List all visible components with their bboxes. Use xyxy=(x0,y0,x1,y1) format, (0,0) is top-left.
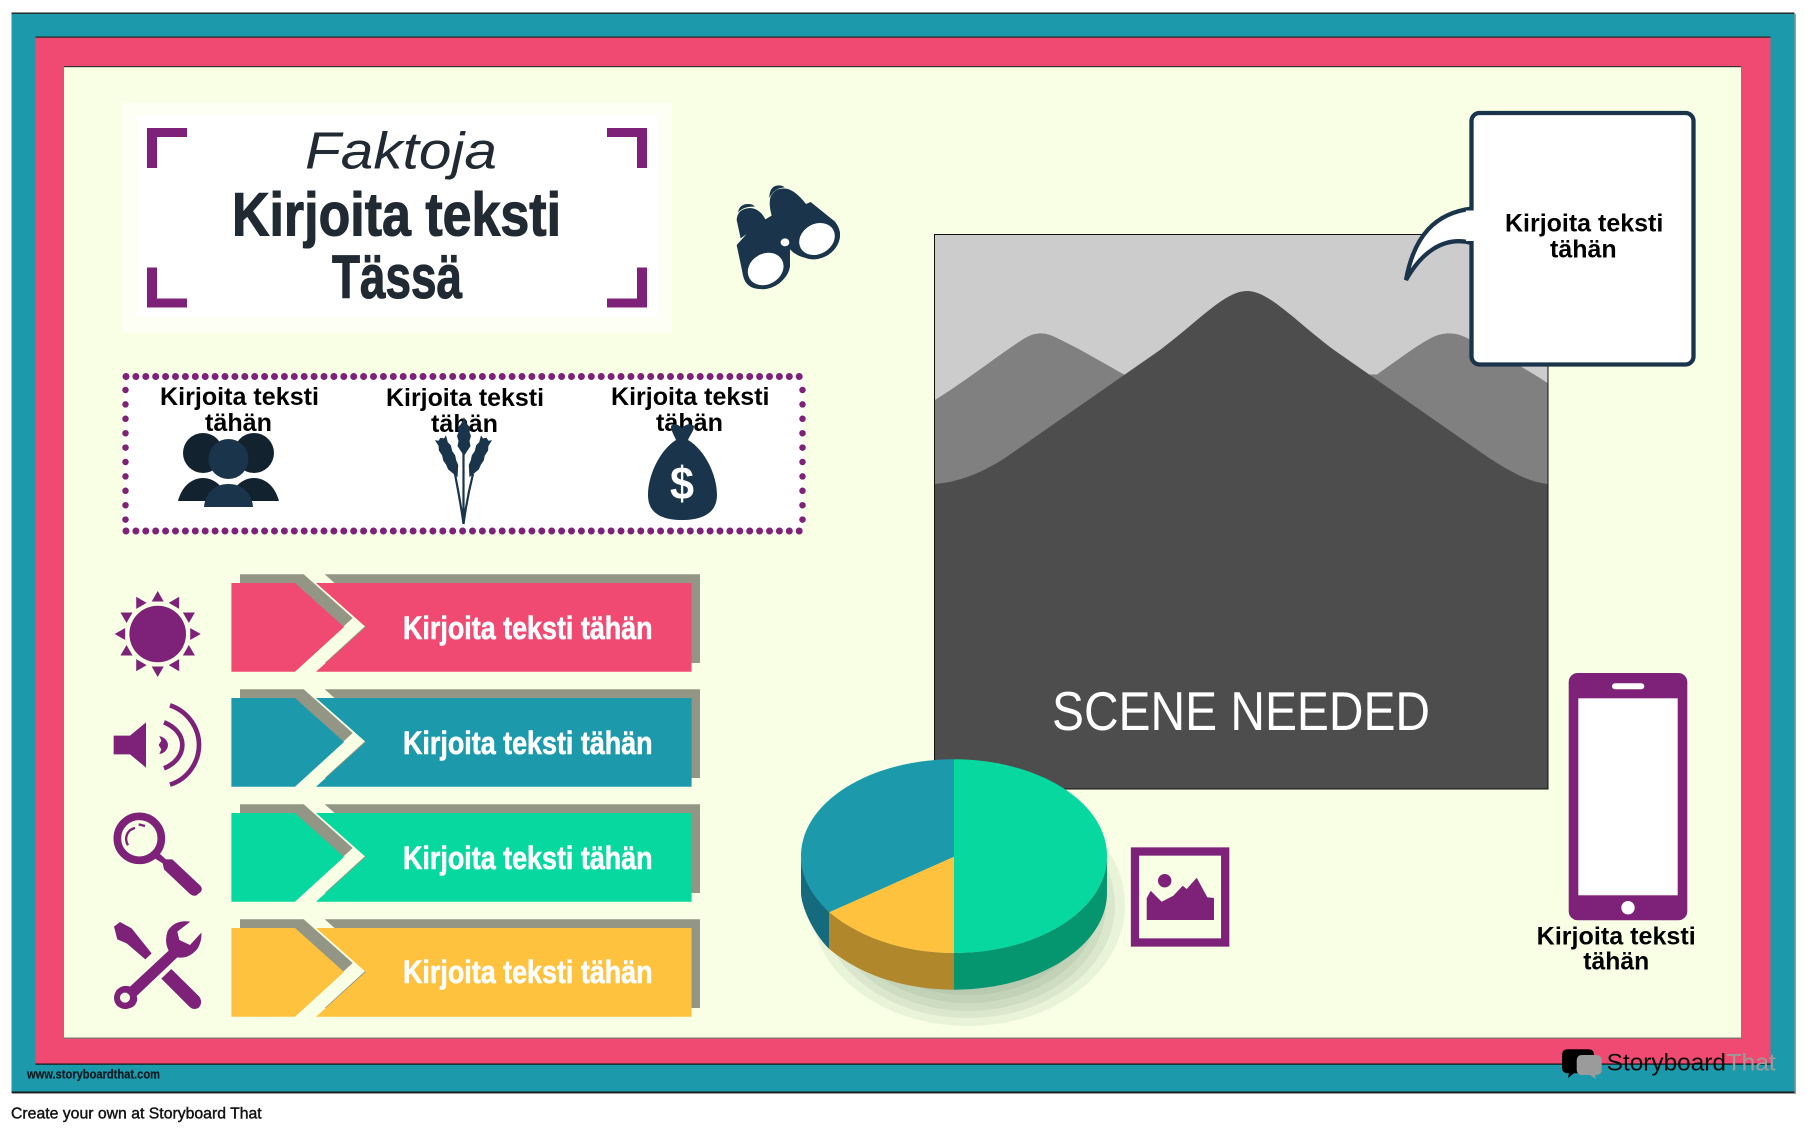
bubble text: tähän xyxy=(1550,236,1617,264)
icon: wheat xyxy=(434,417,493,524)
label: column 3 xyxy=(611,383,770,437)
slice: yellow xyxy=(829,857,954,953)
banner 3: green: Kirjoita teksti tähän xyxy=(403,840,653,876)
icon: sun xyxy=(115,591,201,677)
website url: www.storyboardthat.com xyxy=(26,1068,160,1082)
panel: scene placeholder xyxy=(934,234,1548,789)
title line: Tässä: Tässä xyxy=(332,243,463,311)
pie side walls xyxy=(801,856,829,949)
label: column 1: tähän xyxy=(205,409,272,437)
icon: speaker xyxy=(114,705,199,785)
title line: Kirjoita teksti: Kirjoita teksti xyxy=(232,180,561,248)
bubble text: Kirjoita teksti xyxy=(1505,210,1663,238)
icon: binoculars xyxy=(735,185,848,298)
label: column 3: Kirjoita teksti xyxy=(611,383,770,411)
phone caption: tähän xyxy=(1583,947,1649,975)
label: column 2: Kirjoita teksti xyxy=(386,384,544,412)
speech bubble xyxy=(1406,113,1694,364)
label: column 1: Kirjoita teksti xyxy=(160,383,319,411)
icon: smartphone xyxy=(1569,673,1687,920)
panel: dotted icon box xyxy=(124,376,803,531)
icon: people xyxy=(178,433,279,507)
footer credit: Create your own at Storyboard That xyxy=(11,1106,262,1122)
banner 4: yellow: Kirjoita teksti tähän xyxy=(403,954,653,990)
phone caption xyxy=(1537,922,1696,975)
icon: money bag: $ xyxy=(670,457,694,509)
banner 1: pink xyxy=(231,574,700,672)
scene: front mountain xyxy=(935,291,1548,788)
banner 3: green xyxy=(231,804,700,902)
scene: back mountains xyxy=(935,333,1548,484)
title block xyxy=(122,103,672,333)
icon: picture frame xyxy=(1135,852,1225,942)
label: column 2: tähän xyxy=(431,410,498,438)
slice: teal xyxy=(801,759,954,912)
logo: Storyboard That xyxy=(1562,1049,1776,1079)
banner 4: yellow xyxy=(231,919,700,1017)
pie chart xyxy=(801,759,1125,1026)
label: column 3: tähän xyxy=(656,409,723,437)
scene label: SCENE NEEDED xyxy=(1052,680,1430,742)
panel: cream background xyxy=(64,66,1741,1039)
banner 1: pink: Kirjoita teksti tähän xyxy=(403,610,653,646)
icon: money bag xyxy=(648,424,717,520)
slice: green xyxy=(954,759,1107,953)
label: column 2 xyxy=(386,384,544,438)
logo: Storyboard That: That xyxy=(1727,1050,1776,1077)
label: column 1 xyxy=(160,383,319,437)
phone caption: Kirjoita teksti xyxy=(1537,922,1696,950)
pie shadow xyxy=(811,784,1125,1026)
banner 2: teal: Kirjoita teksti tähän xyxy=(403,725,653,761)
banner 2: teal xyxy=(231,689,700,787)
logo: Storyboard That: Storyboard xyxy=(1607,1050,1726,1077)
title line: Faktoja: Faktoja xyxy=(305,122,497,180)
title corner brackets xyxy=(147,128,647,308)
icon: magnifier xyxy=(117,816,202,896)
icon: tools xyxy=(114,921,201,1009)
bubble text xyxy=(1505,210,1663,264)
